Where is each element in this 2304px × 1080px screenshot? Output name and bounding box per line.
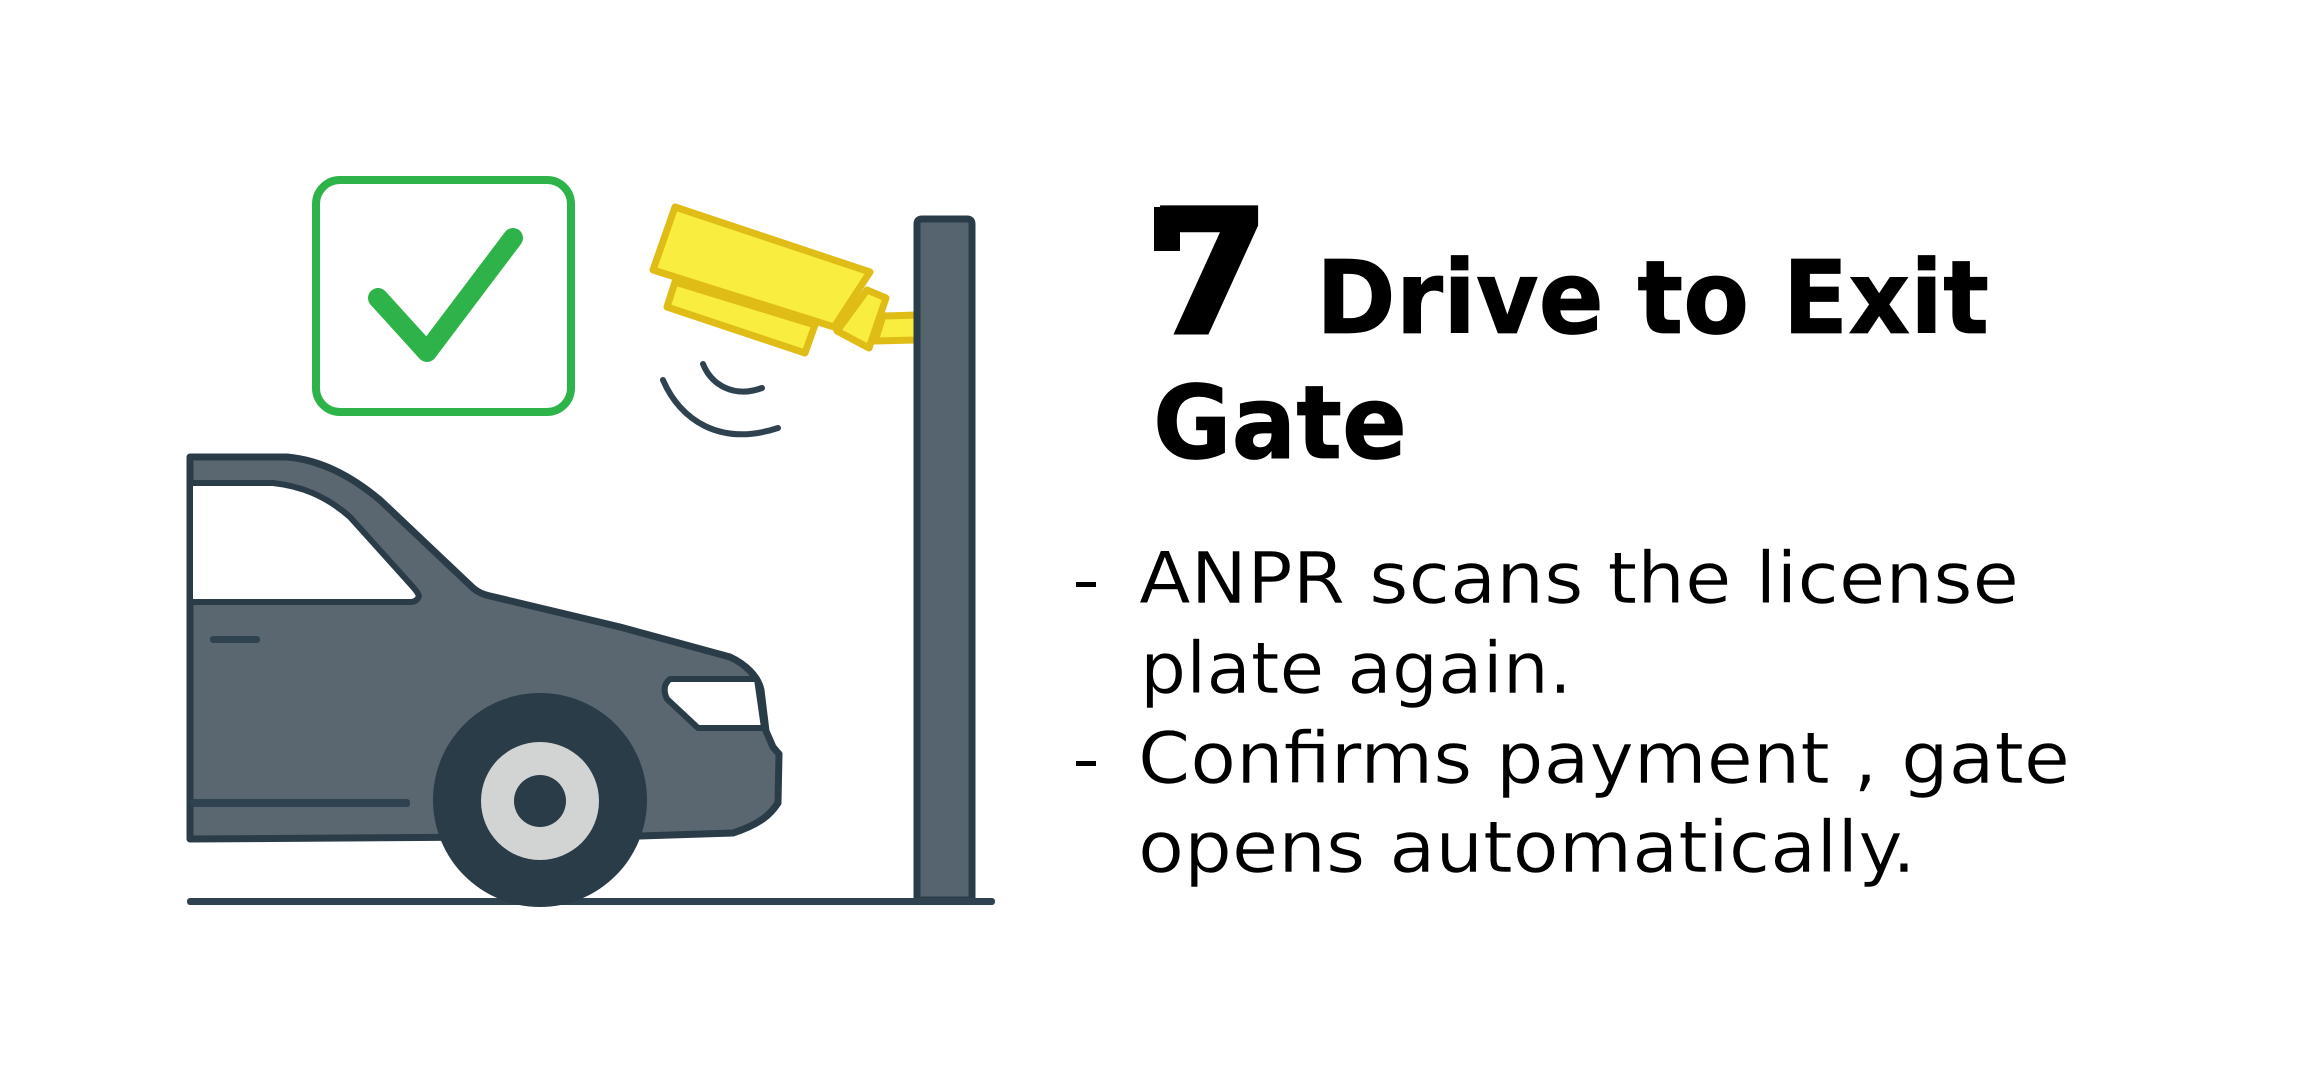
step heading	[1150, 172, 1989, 483]
step number: 7	[1150, 172, 1270, 374]
bullet two: opens automatically.	[1138, 806, 1916, 889]
icon: ANPR camera	[653, 207, 917, 353]
front wheel	[433, 693, 647, 907]
car body	[190, 457, 779, 839]
bullet list	[1076, 537, 2070, 889]
bullet one: plate again.	[1140, 627, 1572, 710]
bullet two	[1076, 717, 2070, 889]
bullet one: ANPR scans the license	[1139, 537, 2019, 620]
icon: scan signal arcs	[663, 364, 778, 434]
car	[190, 457, 779, 907]
heading line one: Drive to Exit	[1316, 239, 1989, 358]
side trim	[190, 799, 410, 807]
illustration: car at exit gate	[187, 180, 995, 907]
bullet one	[1076, 537, 2019, 710]
icon: green check box	[316, 180, 571, 412]
ground line	[187, 898, 995, 905]
headlight	[665, 679, 764, 728]
bullet two: Confirms payment , gate	[1138, 717, 2070, 800]
car window	[190, 483, 419, 602]
gate pole	[917, 219, 972, 900]
heading line two: Gate	[1153, 364, 1407, 483]
door handle	[210, 636, 260, 643]
